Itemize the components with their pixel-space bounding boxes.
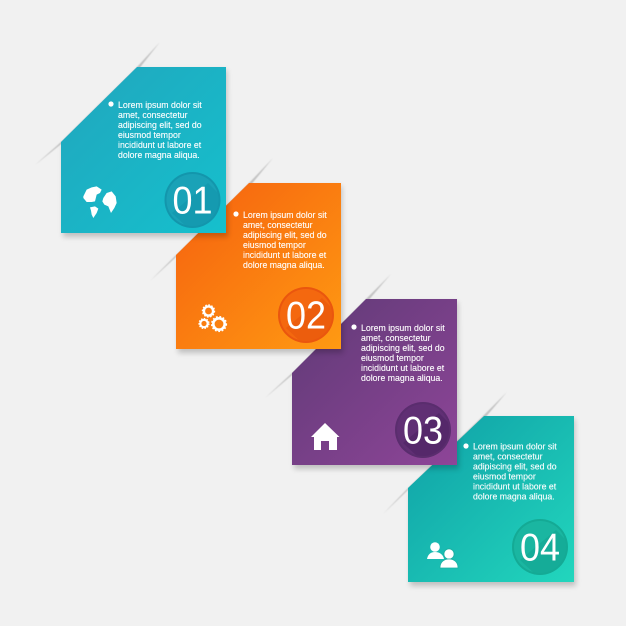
panel: step 4: [383, 392, 580, 590]
text 2: incididunt ut labore et: [243, 250, 327, 260]
text 1: Lorem ipsum dolor sit: [118, 100, 202, 110]
text 3: adipiscing elit, sed do: [361, 343, 445, 353]
number badge 4: 04: [520, 526, 560, 570]
card shadow 3: [294, 302, 459, 469]
card 3: [292, 299, 457, 465]
card 4: [408, 416, 574, 582]
icon: globe: [83, 186, 117, 218]
number badge 1: [164, 172, 220, 228]
text 4: eiusmod tempor: [473, 472, 536, 482]
number badge 1: 01: [172, 180, 212, 222]
text 2: eiusmod tempor: [243, 240, 306, 250]
text 4: adipiscing elit, sed do: [473, 462, 557, 472]
number badge 2: 02: [286, 294, 326, 338]
text 4: amet, consectetur: [473, 452, 543, 462]
number badge 3: 03: [403, 410, 443, 452]
slit shadow 1: [35, 42, 160, 165]
number badge 3: [395, 402, 451, 458]
slit shadow 3: [265, 274, 391, 398]
text 4: incididunt ut labore et: [473, 482, 557, 492]
number badge 4: [512, 519, 568, 575]
text 3: Lorem ipsum dolor sit: [361, 323, 445, 333]
text 1: adipiscing elit, sed do: [118, 120, 202, 130]
card 1: [61, 67, 226, 233]
panel: step 3: [265, 274, 463, 473]
card shadow 4: [410, 419, 576, 586]
icon: house: [311, 423, 340, 450]
icon: people: [427, 542, 458, 568]
card shadow 2: [178, 186, 343, 353]
text 3: amet, consectetur: [361, 333, 431, 343]
card 2: [176, 183, 341, 349]
text 3: dolore magna aliqua.: [361, 373, 443, 383]
bullet 2: [233, 211, 239, 217]
text 2: adipiscing elit, sed do: [243, 230, 327, 240]
number badge 2: [278, 287, 334, 343]
panel: step 2: [150, 158, 346, 358]
text 4: dolore magna aliqua.: [473, 492, 555, 502]
text 3: incididunt ut labore et: [361, 363, 445, 373]
text 3: eiusmod tempor: [361, 353, 424, 363]
slit shadow 4: [383, 392, 507, 514]
text 2: Lorem ipsum dolor sit: [243, 210, 327, 220]
text 1: amet, consectetur: [118, 110, 188, 120]
text 4: Lorem ipsum dolor sit: [473, 442, 557, 452]
card shadow 1: [63, 70, 228, 237]
text 1: dolore magna aliqua.: [118, 150, 200, 160]
text 2: dolore magna aliqua.: [243, 260, 325, 270]
text 1: eiusmod tempor: [118, 130, 181, 140]
icon: gears: [199, 305, 226, 331]
panel: step 1: [35, 42, 232, 243]
text 1: incididunt ut labore et: [118, 140, 202, 150]
bullet 4: [463, 443, 469, 449]
bullet 1: [108, 101, 114, 107]
slit shadow 2: [150, 158, 273, 281]
text 2: amet, consectetur: [243, 220, 313, 230]
bullet 3: [351, 324, 357, 330]
